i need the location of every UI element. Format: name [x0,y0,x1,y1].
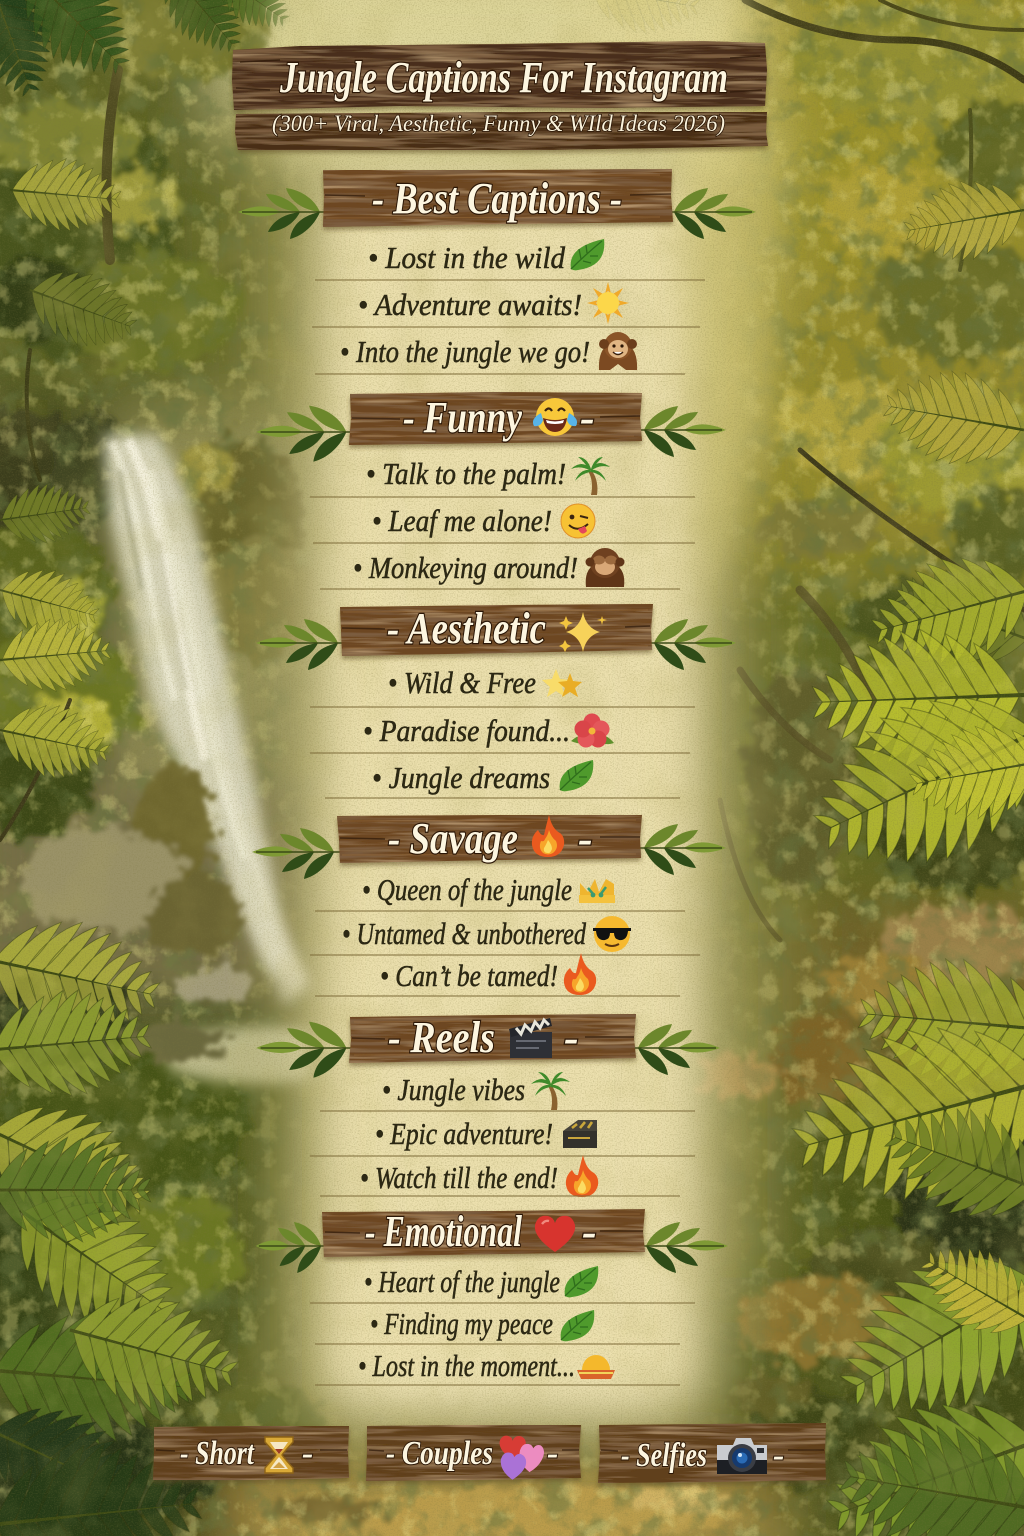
panel: savage [252,814,726,996]
caption: Watch till the end!: • Watch till the end! [360,1160,558,1195]
panel: emotional [256,1207,728,1385]
caption: Jungle dreams [325,760,680,798]
caption: Queen of the jungle: • Queen of the jungle [362,872,572,907]
tree branches and vines [0,0,1024,940]
bottom sign: Couples: - Couples [386,1435,493,1472]
section heading: Funny: - Funny [403,393,522,442]
caption: Finding my peace [315,1306,680,1344]
waterfall [103,435,310,1083]
left canopy foliage [0,0,315,840]
caption: Epic adventure!: • Epic adventure! [375,1116,553,1151]
caption: Jungle dreams: • Jungle dreams [372,760,550,795]
section heading: Aesthetic [256,604,736,670]
caption: Monkeying around! [320,548,680,589]
caption: Into the jungle we go! [315,332,685,374]
section heading: Reels: - Reels [388,1013,495,1062]
bottom sign: Couples [366,1425,581,1481]
bottom sign: Short: - [302,1435,313,1472]
caption: Talk to the palm! [310,456,695,497]
caption: Jungle vibes: • Jungle vibes [382,1072,525,1107]
section heading: Best Captions: - Best Captions - [372,174,622,223]
caption: Lost in the wild [315,239,705,280]
section heading: Emotional: - [582,1207,597,1256]
bottom sign: Selfies: - Selfies [621,1437,707,1474]
caption: Lost in the moment...: • Lost in the moment... [358,1348,575,1383]
bottom sign: Selfies [598,1423,826,1483]
section heading: Emotional [256,1207,728,1273]
caption: Can't be tamed! [315,953,680,996]
subtitle plank: (300+ Viral, Aesthetic, Funny & WIld Ideas 2026) [272,111,725,136]
rocks on right bank [260,905,1024,1536]
caption: Into the jungle we go!: • Into the jungle we go! [340,334,590,369]
section heading: Aesthetic: - Aesthetic [387,604,546,653]
section heading: Savage: - [578,814,593,863]
main title plank [232,41,767,110]
bottom sign: Couples: - [547,1435,558,1472]
caption: Adventure awaits! [312,282,700,327]
caption: Paradise found... [310,713,690,753]
panel: best captions [238,169,756,374]
caption: Untamed & unbothered: • Untamed & unbothered [342,916,586,951]
title sign [232,41,768,150]
panel: funny [256,392,726,589]
section heading: Best Captions [238,169,756,239]
caption: Heart of the jungle: • Heart of the jungle [364,1264,560,1299]
section heading: Savage: - Savage [388,814,518,863]
caption: Epic adventure! [310,1116,695,1156]
central parchment wash [280,0,790,1410]
small leaves of left tree and right canopy [0,154,1024,789]
section heading: Reels: - [564,1013,579,1062]
boulders at waterfall base [23,765,255,1058]
caption: Leaf me alone! [313,503,695,543]
section heading: Savage [252,814,726,879]
caption: Queen of the jungle [315,872,685,911]
bottom sign: Short: - Short [180,1435,255,1472]
caption: Wild & Free [310,665,695,707]
section heading: Funny: - [580,393,595,442]
caption: Watch till the end! [320,1155,680,1197]
bottom sign: Short [153,1426,349,1480]
section heading: Funny [256,392,726,462]
caption: Leaf me alone!: • Leaf me alone! [372,503,552,538]
caption: Adventure awaits!: • Adventure awaits! [358,287,582,322]
caption: Wild & Free: • Wild & Free [388,665,536,700]
caption: Jungle vibes [320,1072,695,1111]
bottom sign: Selfies: - [773,1437,784,1474]
section heading: Emotional: - Emotional [365,1207,523,1256]
caption: Finding my peace: • Finding my peace [370,1306,553,1341]
subtitle plank [235,111,768,150]
panel: reels [256,1013,720,1197]
section heading: Reels [256,1013,720,1078]
caption: Talk to the palm!: • Talk to the palm! [366,456,566,491]
caption: Monkeying around!: • Monkeying around! [353,550,578,585]
caption: Paradise found...: • Paradise found... [363,713,570,748]
panel: aesthetic [256,604,736,798]
caption: Heart of the jungle [310,1264,695,1303]
caption: Can't be tamed!: • Can’t be tamed! [380,958,558,993]
caption: Lost in the wild: • Lost in the wild [368,240,565,275]
main title plank: Jungle Captions For Instagram [279,53,728,102]
